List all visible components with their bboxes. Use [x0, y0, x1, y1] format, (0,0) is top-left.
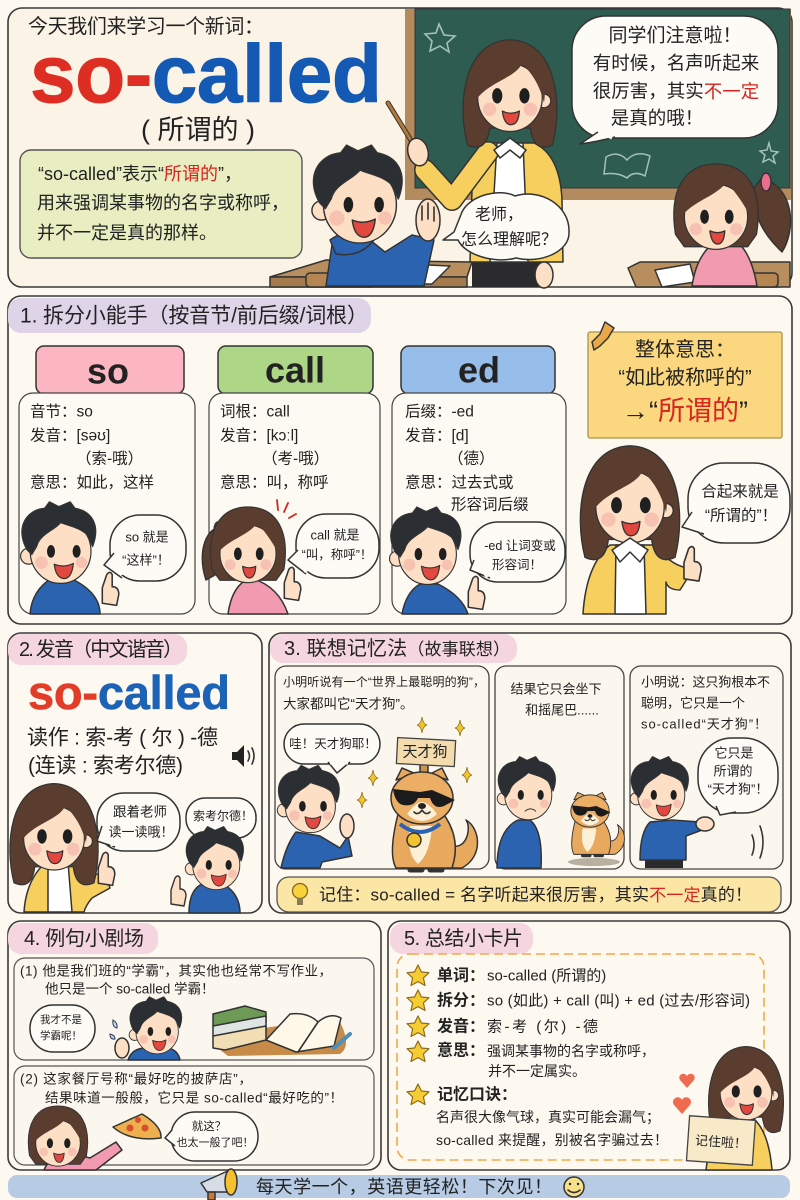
comic frame 1	[275, 666, 489, 870]
reading: 读作 : 索-考 ( 尔 ) -德	[27, 726, 218, 750]
comic frame 3	[630, 666, 783, 869]
attention marks	[277, 500, 296, 518]
boy 1	[21, 502, 119, 614]
bubble: 所谓的	[713, 764, 753, 778]
summary text: so-called 来提醒，别被名字骗过去！	[436, 1132, 668, 1148]
card: ed: 发音：[d]	[405, 426, 469, 444]
heading 1	[8, 298, 371, 333]
comic frame 1: 大家都叫它“天才狗”。	[283, 696, 414, 712]
bubble: ed	[470, 522, 565, 582]
bubble	[30, 1005, 95, 1052]
card: so: so	[87, 350, 129, 392]
chalkboard	[405, 9, 791, 200]
card: ed: 形容词后缀	[451, 496, 529, 514]
bubble: combined: “所谓的”！	[705, 506, 777, 524]
translation: ( 所谓的 )	[141, 115, 255, 145]
teacher speech bubble: 同学们注意啦！	[608, 24, 742, 46]
bubble: 也太一般了吧！	[176, 1136, 254, 1149]
summary text: 发音：	[437, 1016, 485, 1036]
heading 2	[8, 634, 187, 665]
remember strip	[277, 877, 781, 912]
card: call: （考-哦）	[262, 450, 329, 468]
heading 5: 5. 总结小卡片	[404, 927, 523, 950]
pouting boy	[115, 997, 182, 1060]
lead text: 今天我们来学习一个新词：	[28, 15, 264, 38]
bubble: so	[104, 515, 186, 581]
heading 2: 2. 发音（中文谐音）	[19, 638, 183, 661]
panel: intro	[8, 8, 792, 288]
summary text: 拆分：	[437, 992, 485, 1010]
bubble: so: “这样”！	[122, 552, 170, 568]
bubble	[165, 1112, 258, 1161]
comic frame 2: 结果它只会坐下	[510, 682, 602, 696]
bubble: ed: 形容词！	[492, 557, 542, 572]
heading 5	[390, 923, 533, 954]
card: so	[19, 346, 195, 614]
bubble: 它只是	[714, 746, 754, 760]
example 2: 结果味道一般般，它只是 so-called“最好吃的”！	[45, 1090, 343, 1106]
dog with sunglasses	[391, 762, 478, 870]
teacher speech bubble	[572, 16, 778, 144]
student bubble	[443, 193, 569, 260]
linked reading: (连读 : 索考尔德)	[28, 754, 183, 778]
heading 3: 3. 联想记忆法（故事联想）	[284, 637, 510, 660]
heading 4: 4. 例句小剧场	[24, 927, 144, 950]
bubble: ed: -ed 让词变或	[484, 538, 556, 553]
bubble: 学霸呢！	[40, 1029, 82, 1042]
summary text: 索-考 (尔) -德	[487, 1018, 598, 1036]
comic frame 2	[495, 666, 624, 869]
summary text: 强调某事物的名字或称呼，	[487, 1043, 655, 1059]
card: call: call	[265, 350, 325, 390]
word so-called: so-called	[28, 666, 230, 718]
girl	[28, 1106, 122, 1170]
boy	[171, 827, 243, 913]
summary text: so (如此) + call (叫) + ed (过去/形容词)	[487, 992, 750, 1010]
definition box: 用来强调某事物的名字或称呼，	[37, 193, 289, 213]
bubble: 就这？	[192, 1119, 226, 1133]
bubble: follow	[97, 793, 180, 851]
heading 3	[270, 634, 517, 663]
example 1	[14, 958, 374, 1060]
boy	[312, 145, 440, 286]
bubble	[698, 738, 778, 815]
card: ed: ed	[458, 350, 500, 390]
card: so: （索-哦）	[76, 450, 143, 468]
summary text	[407, 965, 750, 1148]
summary text: 记忆口诀：	[437, 1084, 517, 1104]
bubble: call: “叫，称呼”！	[302, 548, 372, 562]
girl	[674, 164, 791, 286]
heading 1: 1. 拆分小能手（按音节/前后缀/词根）	[20, 304, 368, 328]
card: call: 意思：叫，称呼	[220, 472, 329, 492]
bubble: call	[288, 514, 379, 578]
dashed summary card	[397, 954, 764, 1160]
note: overall meaning: 整体意思：	[635, 338, 735, 361]
bubble: repeat	[186, 798, 256, 842]
panel: section 4	[8, 921, 381, 1170]
card: so: 意思：如此，这样	[30, 472, 154, 492]
summary text: so-called (所谓的)	[487, 968, 606, 984]
footer banner	[8, 1169, 790, 1200]
sweat drops	[110, 1020, 117, 1039]
hearts	[673, 1074, 695, 1114]
sparkles	[357, 717, 472, 808]
teacher	[10, 784, 115, 912]
icon: smile	[564, 1177, 584, 1197]
icon: speaker	[232, 745, 254, 767]
icon: megaphone	[201, 1169, 237, 1200]
example 1: (1) 他是我们班的“学霸”，其实他也经常不写作业，	[20, 964, 332, 978]
small dog	[568, 792, 624, 866]
teacher speech bubble: 很厉害，其实不一定	[593, 80, 759, 102]
teacher speech bubble: 是真的哦！	[611, 108, 703, 128]
teacher	[580, 446, 701, 614]
comic frame 3: so-called“天才狗”！	[641, 716, 767, 732]
sad boy	[497, 757, 555, 868]
definition box	[20, 150, 302, 258]
example 1: 他只是一个 so-called 学霸！	[45, 982, 215, 996]
sign: 天才狗	[402, 744, 448, 760]
example 2	[14, 1066, 374, 1170]
boy desk	[270, 260, 472, 287]
comic frame 3: 小明说：这只狗根本不	[641, 674, 770, 690]
pizza	[113, 1114, 161, 1139]
comic frame 3: 聪明，它只是一个	[641, 696, 745, 710]
books	[213, 1006, 350, 1056]
definition box: “so-called”表示“所谓的”，	[38, 164, 242, 184]
card: ed: 意思：过去式或	[405, 472, 514, 492]
main word so-called: so-called	[30, 28, 382, 120]
bubble: call: call 就是	[310, 528, 360, 542]
card: ed: （德）	[448, 450, 495, 468]
bubble: “天才狗”！	[708, 782, 768, 796]
comic frame 2: 和摇尾巴......	[525, 702, 599, 718]
comic frame 1: 小明听说有一个“世界上最聪明的狗”，	[283, 674, 485, 689]
student bubble: 怎么理解呢？	[461, 230, 557, 248]
card: so: 发音：[səʊ]	[30, 426, 110, 444]
teacher with sign	[686, 1047, 784, 1170]
panel: section 2	[8, 633, 262, 913]
definition box: 并不一定是真的那样。	[37, 223, 217, 243]
girl	[202, 507, 301, 614]
card: ed: 后缀：-ed	[405, 402, 474, 420]
bubble: wow: 哇！天才狗耶！	[289, 737, 377, 751]
summary text: 名声很大像气球，真实可能会漏气；	[436, 1109, 660, 1126]
boy	[277, 765, 354, 868]
heading 4	[8, 923, 158, 954]
panel: section 5	[388, 921, 790, 1170]
bubble: follow: 读一读哦！	[108, 824, 174, 840]
bubble: wow	[284, 724, 380, 773]
bubble: repeat: 索考尔德！	[193, 808, 253, 823]
teacher	[388, 40, 563, 288]
bubble: follow: 跟着老师	[113, 804, 167, 820]
bubble: so: so 就是	[125, 530, 169, 544]
sign	[396, 738, 456, 767]
panel: section 1	[8, 296, 792, 624]
remember strip: 记住：so-called = 名字听起来很厉害，其实不一定真的！	[319, 886, 752, 904]
bubble: 我才不是	[40, 1013, 82, 1026]
summary text: 意思：	[437, 1040, 485, 1060]
card: ed	[392, 346, 566, 614]
note: overall meaning: →“所谓的”	[622, 396, 748, 426]
card: call: 词根：call	[220, 402, 290, 420]
student bubble: 老师，	[475, 206, 523, 224]
summary text: 单词：	[437, 966, 485, 984]
bubble: combined: 合起来就是	[701, 482, 779, 500]
bubble: combined	[682, 463, 790, 543]
footer banner: 每天学一个，英语更轻松！下次见！	[256, 1177, 552, 1197]
boy 2	[390, 507, 485, 614]
girl desk	[628, 262, 790, 287]
pointing boy	[630, 757, 763, 868]
card: call	[209, 346, 380, 614]
note: overall meaning: “如此被称呼的”	[618, 366, 752, 389]
note: overall meaning	[588, 322, 782, 438]
card: call: 发音：[kɔːl]	[220, 426, 298, 444]
summary text: 并不一定属实。	[488, 1063, 586, 1079]
panel: section 3	[269, 633, 791, 913]
teacher speech bubble: 有时候，名声听起来	[593, 52, 759, 74]
teacher with sign: 记住啦！	[695, 1133, 747, 1151]
card: so: 音节：so	[30, 402, 93, 420]
example 2: (2) 这家餐厅号称“最好吃的披萨店”，	[20, 1070, 252, 1086]
